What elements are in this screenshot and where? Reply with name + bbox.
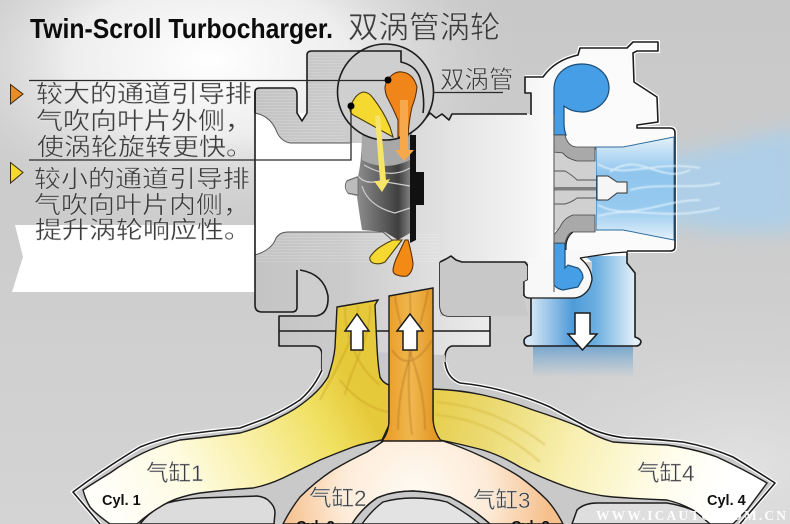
yellow scroll: [350, 92, 393, 137]
arrow: central flow: [397, 314, 423, 350]
backplate and nut: [554, 115, 627, 292]
title: 双涡管涡轮: [348, 11, 500, 45]
arrow: cylinder 1 flow: [345, 314, 369, 350]
arrow: orange flow: [395, 100, 414, 161]
compressor outlet: [524, 232, 641, 346]
lower yellow drop: [370, 240, 402, 264]
cylinder 1 runner: [83, 300, 389, 524]
outlet downward glow: [533, 346, 633, 378]
icon: orange triangle: [10, 84, 23, 104]
compressor housing: [525, 42, 675, 262]
cavity white: [255, 113, 415, 258]
text block: smaller passage: 较小的通道引导排: [34, 166, 250, 193]
icon: yellow triangle: [10, 162, 23, 183]
callout: twin scroll label: 双涡管: [440, 66, 514, 94]
cylinder labels: 气缸3: [473, 488, 531, 513]
text block: larger passage: 使涡轮旋转更快。: [37, 134, 253, 161]
twin-scroll callout line: [433, 92, 503, 94]
text block: smaller passage: 提升涡轮响应性。: [35, 217, 251, 244]
cylinder labels: 气缸2: [309, 486, 367, 511]
cylinder 4 runner: [433, 389, 767, 524]
arrow: outlet flow: [568, 313, 597, 350]
manifold casing: [73, 350, 775, 524]
title: [30, 11, 500, 45]
inset circle: [338, 44, 434, 140]
text block: larger passage: 较大的通道引导排: [36, 81, 252, 108]
white band with chevron: [12, 225, 256, 292]
cylinder labels: Cyl. 4: [707, 493, 746, 509]
cylinder labels: 气缸1: [146, 461, 204, 486]
exhaust air glow: [665, 127, 790, 233]
orange scroll: [385, 72, 417, 137]
compressor blue volute top: [554, 64, 609, 135]
leader lines: [29, 76, 392, 160]
block outline: [440, 256, 528, 296]
cylinders 2 and 3 runner: [283, 437, 563, 524]
text block: larger passage: [36, 81, 253, 161]
watermark: WWW.ICAUTO.COM.CN: [596, 508, 786, 523]
text block: smaller passage: 气吹向叶片内侧，: [34, 192, 250, 219]
cylinder labels: 气缸4: [637, 461, 695, 486]
housing body: [255, 51, 555, 420]
centre arch: [352, 491, 490, 524]
cylinder labels: [102, 461, 746, 524]
cylinder labels: Cyl. 1: [102, 493, 141, 509]
compressor eye: [596, 137, 720, 240]
text block: smaller passage: [34, 166, 251, 244]
title: Twin-Scroll Turbocharger.: [30, 13, 333, 44]
lower orange drop: [393, 240, 413, 276]
arrow: yellow flow: [374, 115, 390, 192]
manifold pockets: [140, 496, 717, 524]
text block: larger passage: 气吹向叶片外侧，: [36, 108, 252, 135]
central runner: [382, 288, 441, 441]
lower right housing block: [440, 256, 528, 316]
turbine wheel: [345, 130, 424, 243]
